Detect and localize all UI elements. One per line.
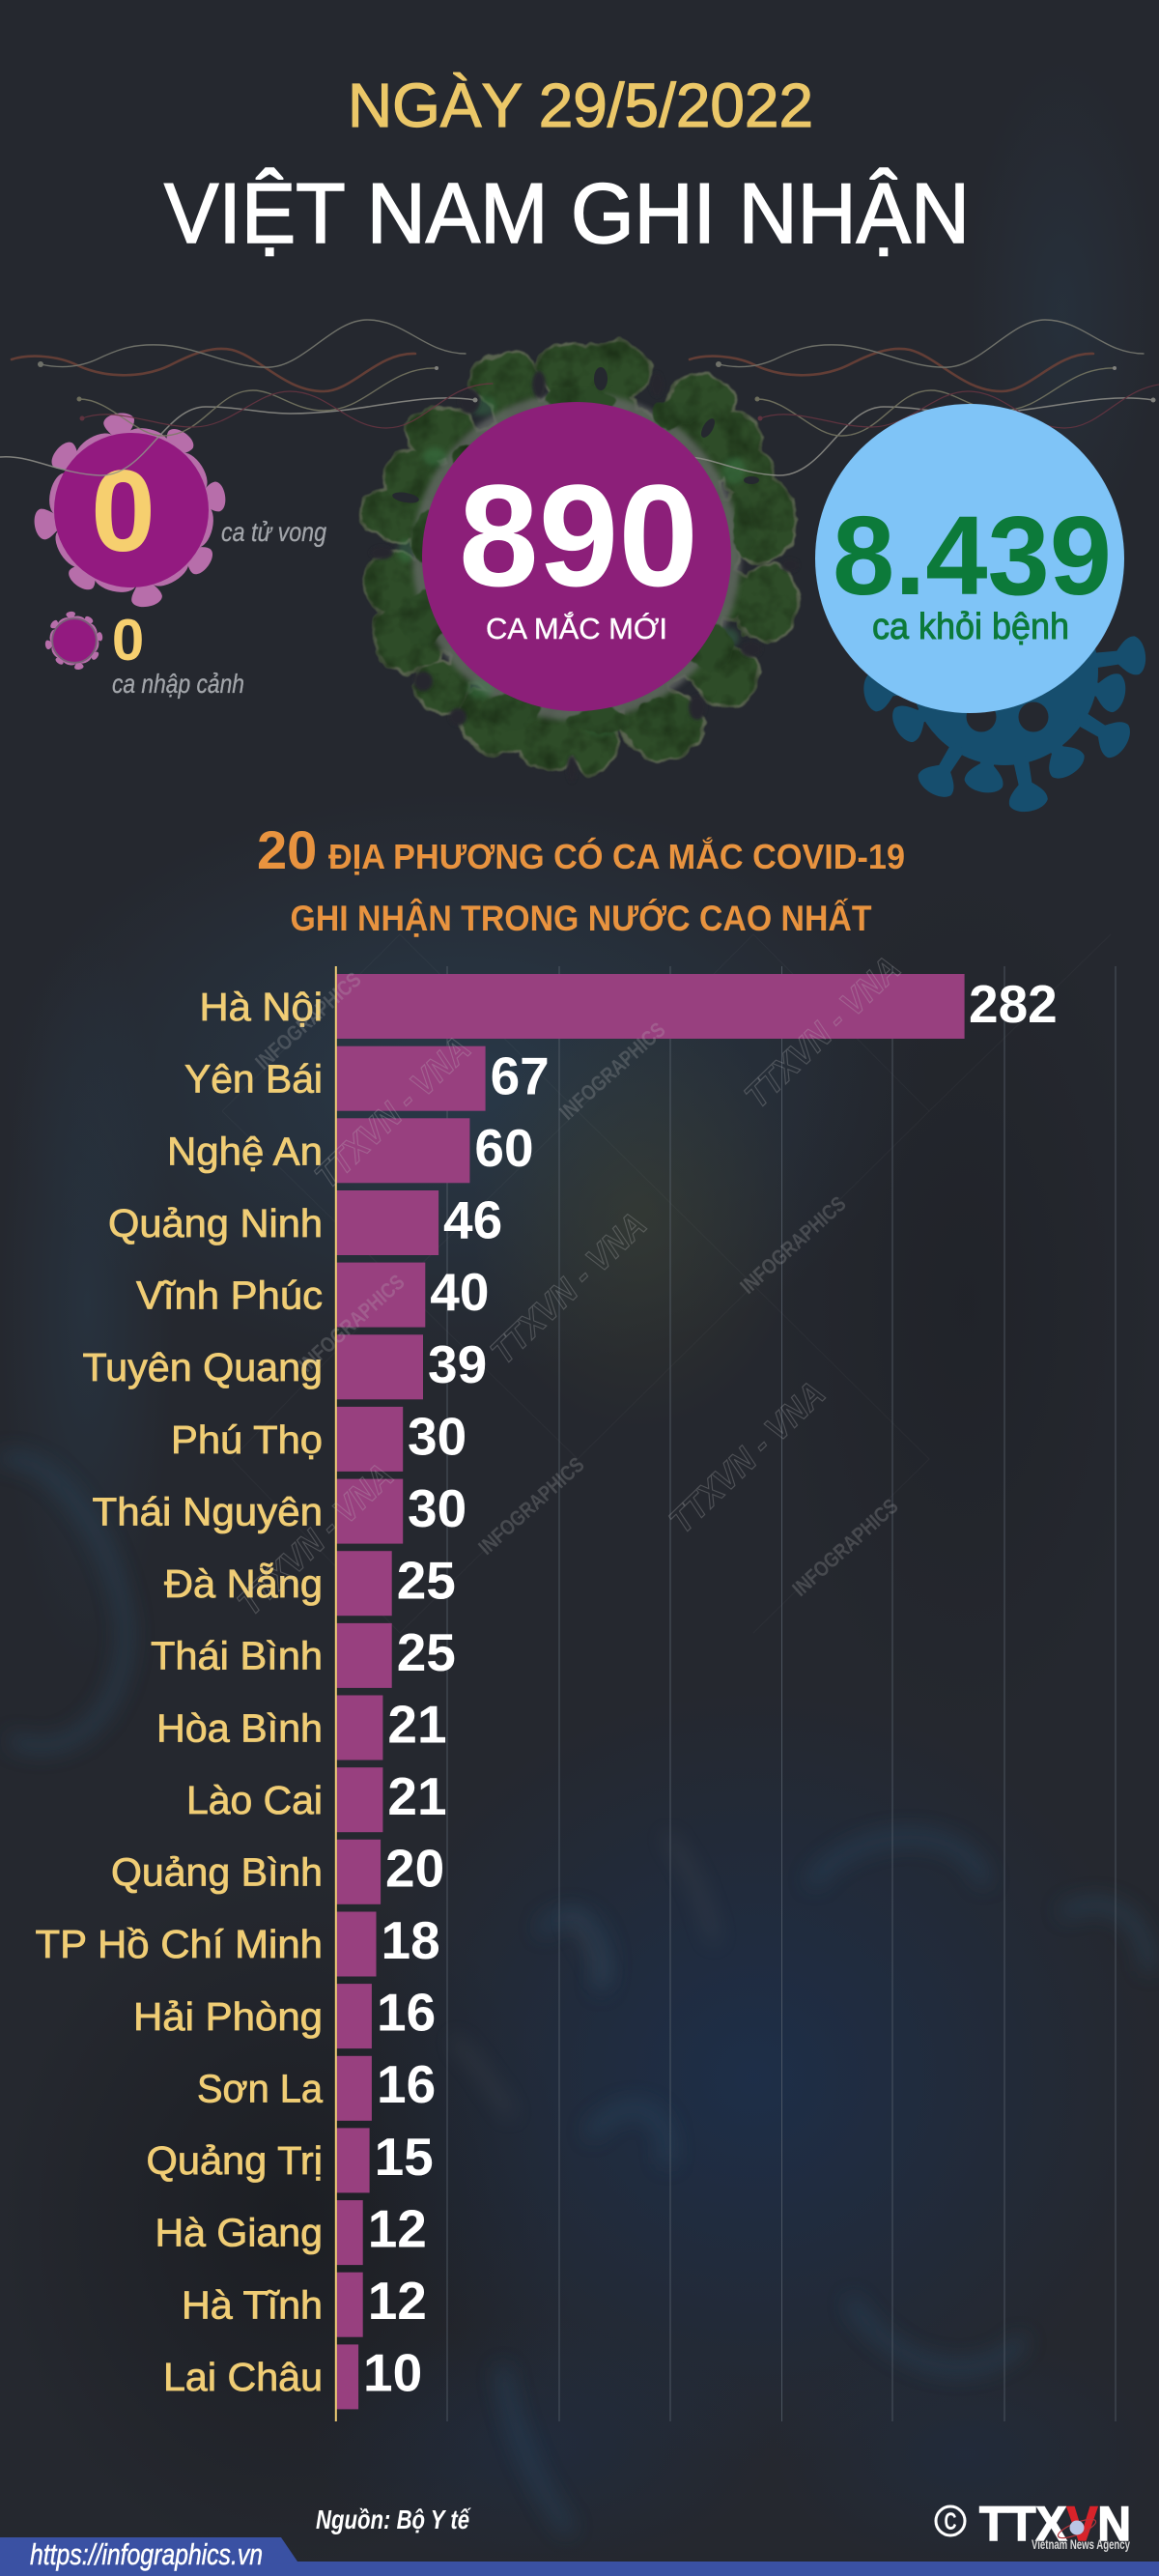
row: Hà Giang: 12: [368, 2198, 427, 2258]
footer url: https://infographics.vn: [30, 2537, 263, 2571]
row: Phú Thọ: [171, 1406, 466, 1472]
chart heading: ĐỊA PHƯƠNG CÓ CA MẮC COVID-19: [328, 836, 905, 876]
watermarks: INFOGRAPHICS: [294, 1270, 410, 1377]
row: Quảng Ninh: [108, 1190, 502, 1255]
row: Hòa Bình: 21: [387, 1695, 447, 1755]
row: TP Hồ Chí Minh: TP Hồ Chí Minh: [35, 1922, 323, 1966]
watermarks: TTXVN - VNA: [662, 1373, 833, 1541]
row: Lai Châu: 10: [363, 2342, 422, 2402]
row: Hải Phòng: 16: [377, 1983, 436, 2043]
number: new cases: 890: [459, 454, 698, 616]
row: Yên Bái: 67: [491, 1045, 550, 1105]
row: Đà Nẵng: [164, 1550, 456, 1616]
bar chart: [35, 966, 1116, 2421]
caption: deaths: ca tử vong: [221, 517, 326, 547]
row: Quảng Bình: Quảng Bình: [111, 1850, 323, 1895]
row: Hà Tĩnh: 12: [368, 2271, 427, 2331]
row: Yên Bái: Yên Bái: [184, 1057, 323, 1102]
row: Thái Bình: Thái Bình: [151, 1634, 323, 1678]
watermarks: INFOGRAPHICS: [473, 1452, 589, 1560]
watermarks: TTXVN - VNA: [230, 1455, 401, 1623]
row: Thái Nguyên: 30: [408, 1478, 466, 1538]
row: Đà Nẵng: 25: [397, 1550, 456, 1610]
wires: left: [0, 320, 493, 475]
row: Hà Giang: Hà Giang: [155, 2211, 323, 2255]
source: Nguồn: Bộ Y tế: [316, 2504, 471, 2534]
logo: TTXVN: TTXVN: [979, 2497, 1131, 2551]
row: Lào Cai: 21: [387, 1766, 447, 1826]
panel: recovered: [815, 404, 1124, 713]
row: Nghệ An: Nghệ An: [167, 1129, 323, 1173]
row: Hà Nội: Hà Nội: [199, 985, 323, 1029]
logo: TTXVN: C: [945, 2508, 956, 2535]
watermarks: INFOGRAPHICS: [554, 1017, 670, 1125]
row: Lào Cai: [186, 1766, 447, 1832]
row: Tuyên Quang: 39: [428, 1334, 487, 1394]
row: Tuyên Quang: Tuyên Quang: [83, 1345, 323, 1389]
panel: new cases: [422, 402, 731, 711]
row: Đà Nẵng: Đà Nẵng: [164, 1561, 323, 1606]
row: Thái Nguyên: [93, 1478, 466, 1544]
row: Hòa Bình: Hòa Bình: [156, 1705, 323, 1750]
watermarks: INFOGRAPHICS: [250, 967, 366, 1074]
row: Hòa Bình: [156, 1695, 447, 1760]
circle: new cases: [422, 402, 731, 711]
row: Tuyên Quang: [83, 1334, 487, 1399]
caption: imported cases: ca nhập cảnh: [112, 669, 244, 699]
chart heading: [257, 819, 905, 938]
row: Hà Giang: [155, 2198, 427, 2265]
row: Lào Cai: Lào Cai: [186, 1778, 323, 1822]
row: Sơn La: Sơn La: [197, 2066, 323, 2110]
number: imported cases: 0: [112, 608, 144, 673]
row: TP Hồ Chí Minh: 18: [381, 1910, 440, 1970]
panel: imported cases: [44, 608, 244, 699]
row: Vĩnh Phúc: 40: [430, 1262, 489, 1322]
row: Hà Tĩnh: [182, 2271, 427, 2337]
axis: [335, 966, 337, 2421]
row: TP Hồ Chí Minh: [35, 1910, 440, 1977]
caption: recovered: ca khỏi bệnh: [872, 607, 1069, 647]
circle: recovered: [815, 404, 1124, 713]
chart heading: GHI NHẬN TRONG NƯỚC CAO NHẤT: [290, 898, 872, 938]
row: Sơn La: [197, 2054, 436, 2121]
icon: blue virus: [862, 578, 1147, 815]
row: Quảng Bình: 20: [385, 1839, 444, 1899]
row: Hà Nội: [199, 974, 1058, 1039]
wires: right: [678, 320, 1159, 475]
row: Quảng Trị: [147, 2127, 434, 2192]
row: Sơn La: 16: [377, 2054, 436, 2114]
row: Quảng Bình: [111, 1839, 444, 1904]
number: deaths: 0: [91, 446, 155, 576]
row: Nghệ An: [167, 1118, 534, 1183]
row: Phú Thọ: Phú Thọ: [171, 1417, 323, 1462]
row: Hà Nội: 282: [969, 974, 1058, 1034]
watermarks: TTXVN - VNA: [483, 1204, 654, 1372]
row: Vĩnh Phúc: Vĩnh Phúc: [136, 1274, 323, 1318]
number: recovered: 8.439: [833, 493, 1112, 618]
row: Hà Tĩnh: Hà Tĩnh: [182, 2282, 323, 2327]
row: Yên Bái: [184, 1045, 550, 1111]
row: Thái Bình: [151, 1622, 456, 1688]
row: Nghệ An: 60: [474, 1118, 534, 1178]
chart heading: 20: [257, 819, 317, 880]
row: Quảng Trị: Quảng Trị: [147, 2138, 323, 2183]
row: Phú Thọ: 30: [408, 1406, 466, 1466]
icon: small purple virus: [44, 611, 103, 671]
row: Quảng Ninh: Quảng Ninh: [108, 1201, 323, 1245]
watermarks: INFOGRAPHICS: [787, 1494, 903, 1601]
watermarks: [230, 948, 908, 1623]
icon: green coronavirus: [362, 343, 799, 783]
row: Thái Bình: 25: [397, 1622, 456, 1682]
watermarks: INFOGRAPHICS: [735, 1191, 851, 1299]
title: date: NGÀY 29/5/2022: [348, 71, 813, 140]
icon: purple virus: [32, 412, 227, 609]
row: Lai Châu: [163, 2342, 422, 2409]
row: Hải Phòng: Hải Phòng: [133, 1994, 323, 2039]
caption: new cases: CA MẮC MỚI: [486, 611, 667, 645]
row: Hải Phòng: [133, 1983, 436, 2048]
watermarks: TTXVN - VNA: [737, 948, 908, 1116]
panel: deaths: [32, 412, 326, 609]
row: Lai Châu: Lai Châu: [163, 2355, 323, 2399]
row: Thái Nguyên: Thái Nguyên: [93, 1489, 323, 1533]
footer band: [0, 2537, 1159, 2576]
watermarks: TTXVN - VNA: [307, 1028, 478, 1196]
title: Việt Nam ghi nhận: VIỆT NAM GHI NHẬN: [164, 165, 970, 261]
row: Quảng Trị: 15: [375, 2127, 434, 2187]
row: Quảng Ninh: 46: [443, 1190, 502, 1250]
row: Vĩnh Phúc: [136, 1262, 489, 1328]
